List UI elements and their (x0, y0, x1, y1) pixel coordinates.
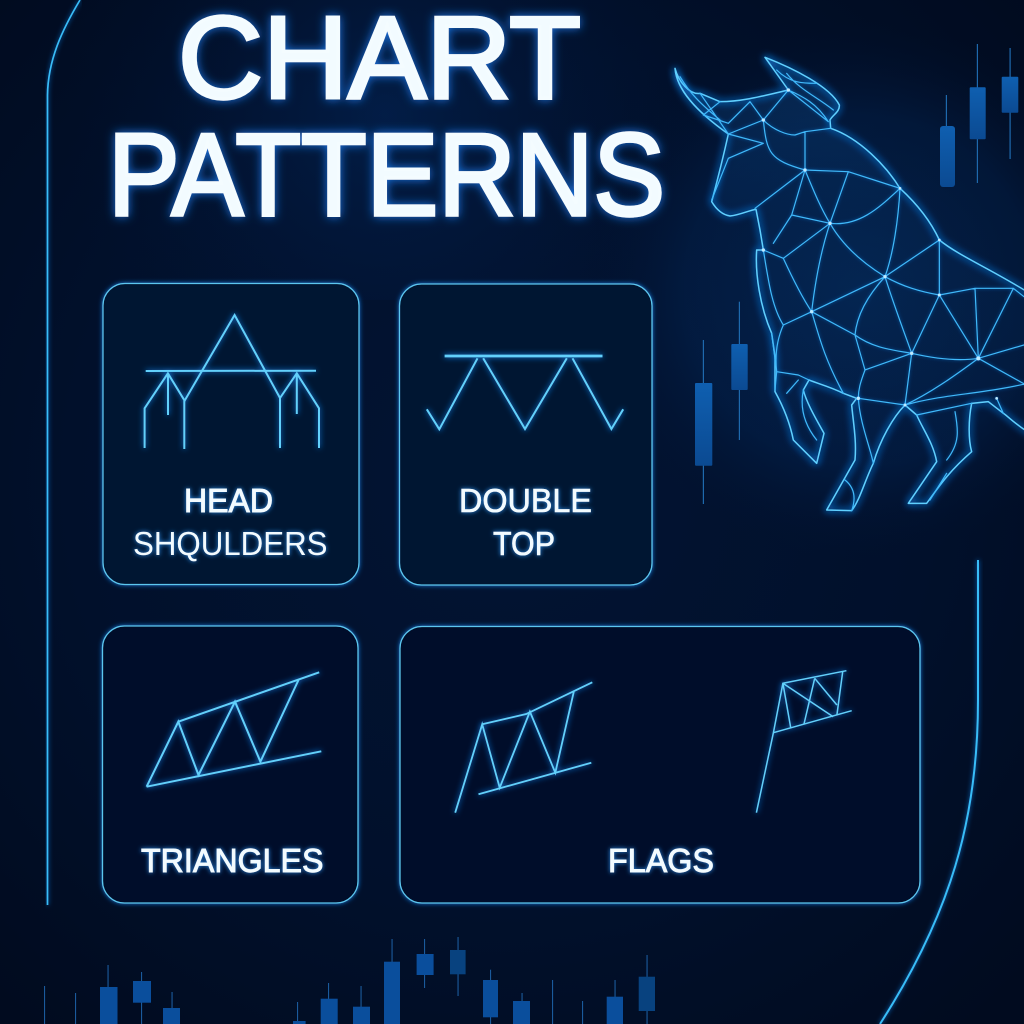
label: head: HEAD (184, 482, 273, 519)
label: shoulders: SHQULDERS (133, 525, 328, 562)
bull silhouette outline (675, 57, 1024, 511)
panel frame (400, 284, 652, 585)
panel frame (400, 626, 920, 903)
title (108, 0, 665, 240)
label: double: DOUBLE (459, 482, 592, 519)
bull mesh lines (680, 70, 1024, 511)
candlesticks: middle (695, 302, 748, 504)
label: top: TOP (493, 525, 555, 562)
bull wireframe illustration (675, 57, 1024, 511)
icon: triangle chart (147, 672, 321, 787)
label: triangles: TRIANGLES (141, 842, 324, 879)
panel: flags (400, 626, 920, 903)
panel frame (103, 284, 359, 584)
panel: head and shoulders (103, 284, 359, 584)
panel: double top (400, 284, 652, 585)
label: flags: FLAGS (608, 842, 714, 879)
icon: double top chart (427, 356, 623, 429)
icon: head and shoulders chart (145, 315, 319, 449)
bull mesh nodes (762, 88, 998, 406)
bull body fill (675, 57, 1024, 511)
background glow: title (0, 0, 800, 300)
icon: flag chart two (756, 671, 852, 813)
candlesticks: bottom (44, 937, 655, 1024)
panel frame (102, 626, 358, 903)
frame arc left (48, 0, 80, 905)
panel: triangles (102, 626, 358, 903)
icon: flag chart one (455, 682, 592, 813)
background glow: bull (0, 0, 1024, 700)
title line 2: PATTERNS (108, 109, 665, 240)
candlesticks: upper right (940, 44, 1018, 187)
frame arc right (880, 560, 978, 1024)
